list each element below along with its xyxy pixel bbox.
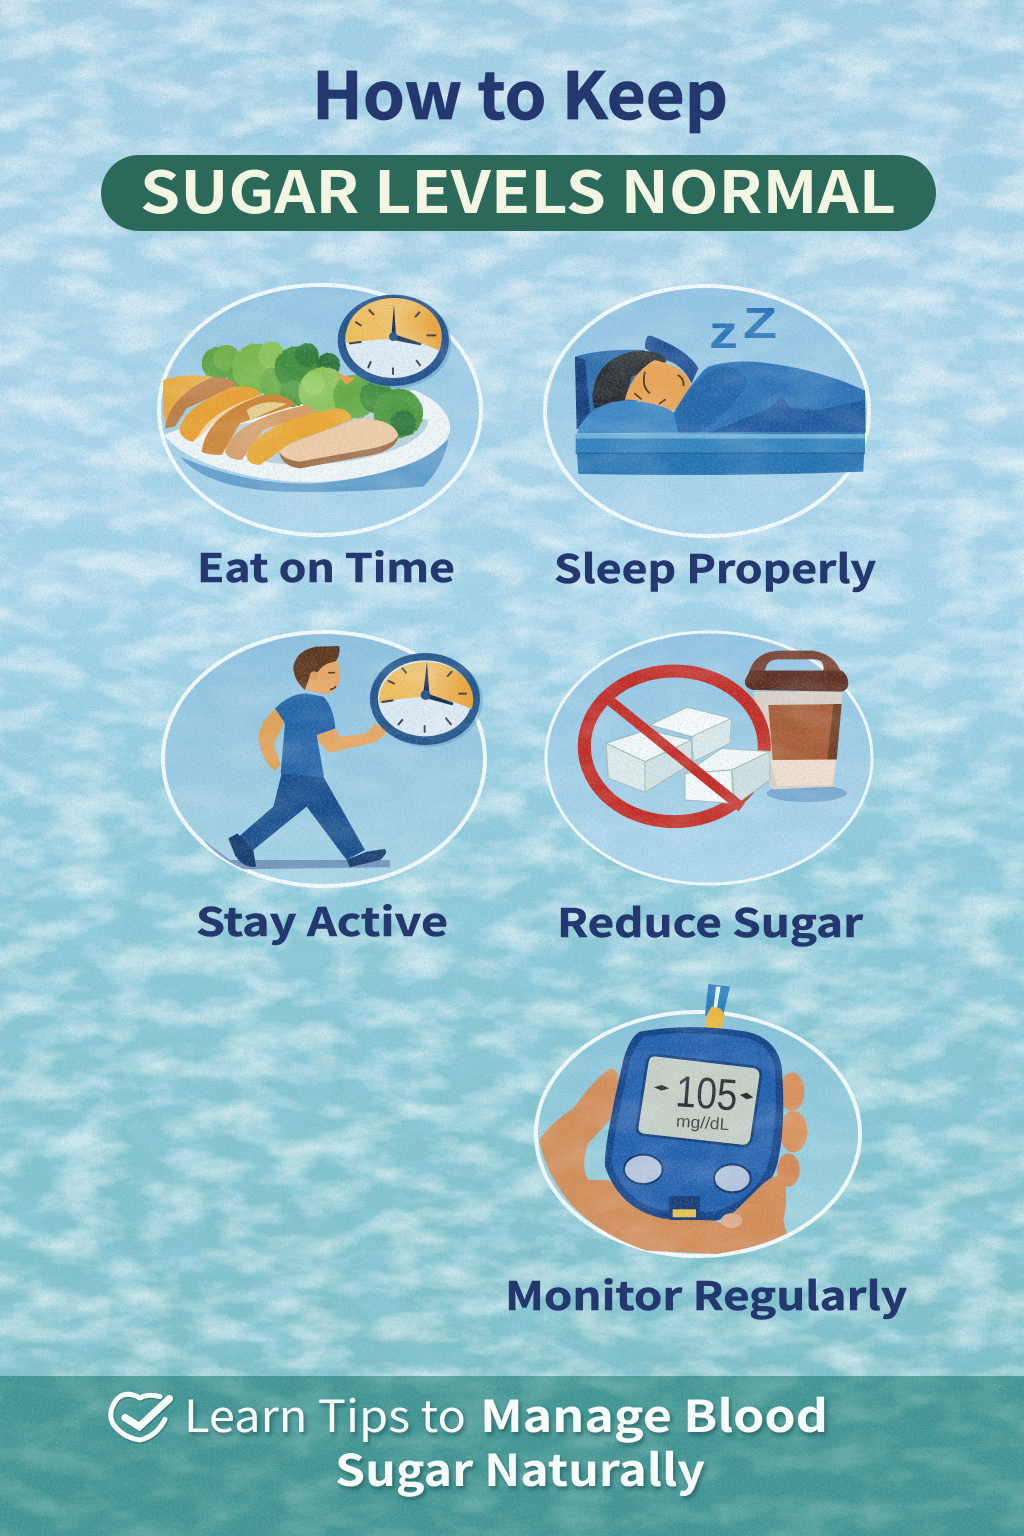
icon: walking man xyxy=(203,646,390,869)
title: How to Keep xyxy=(312,44,728,138)
icon: z z xyxy=(709,299,777,358)
thumb xyxy=(718,1176,786,1243)
label: eat on time: Eat on Time xyxy=(197,538,455,594)
mattress xyxy=(576,433,865,475)
footer text line 1 xyxy=(184,1381,828,1445)
icon: bed and sleeper xyxy=(575,336,866,475)
strip port xyxy=(669,1196,700,1220)
illustration circle xyxy=(546,632,872,884)
prohibition slash xyxy=(608,699,742,807)
illustration circle xyxy=(163,632,485,886)
screen xyxy=(637,1055,761,1146)
plate xyxy=(164,390,450,482)
footer text line 2: Sugar Naturally xyxy=(335,1435,705,1499)
panel: stay active xyxy=(163,632,485,886)
trousers xyxy=(237,773,365,860)
test strip xyxy=(705,984,730,1017)
footer text line 1: Manage Blood xyxy=(480,1381,828,1445)
panel: reduce sugar xyxy=(546,632,872,884)
back arm xyxy=(258,708,284,771)
icon: sugar and coffee xyxy=(584,651,848,822)
coffee cup xyxy=(753,692,843,789)
footer text and icon xyxy=(111,1381,828,1499)
face xyxy=(625,360,691,411)
banner: sugar levels normal: SUGAR LEVELS NORMAL xyxy=(140,146,896,230)
hat xyxy=(645,336,698,383)
icon: z z: Z xyxy=(743,299,777,348)
chicken slices xyxy=(163,375,213,428)
meter reading: 105 xyxy=(674,1067,739,1120)
icon: z z: z xyxy=(709,306,738,358)
meter buttons xyxy=(624,1155,663,1184)
shoes xyxy=(228,833,386,867)
icon: plate with food xyxy=(163,295,451,492)
meat slice xyxy=(279,418,398,468)
icon: hand and meter xyxy=(539,984,807,1254)
blanket xyxy=(673,361,866,433)
palm and thumb xyxy=(539,1068,787,1254)
illustration circle xyxy=(536,1012,860,1256)
plate shadow xyxy=(180,440,448,492)
hair xyxy=(592,351,667,408)
panel: monitor regularly xyxy=(536,984,860,1256)
icon: clock xyxy=(370,653,483,747)
salad xyxy=(202,342,423,438)
fingers xyxy=(779,1072,804,1111)
illustration circle xyxy=(545,286,869,536)
label: stay active: Stay Active xyxy=(196,892,448,948)
footer band xyxy=(0,1376,1024,1536)
clock xyxy=(338,295,451,388)
front arm xyxy=(317,723,386,753)
glucose meter xyxy=(605,1027,783,1221)
icon: heart check xyxy=(111,1394,169,1440)
head xyxy=(305,660,340,694)
label: sleep properly: Sleep Properly xyxy=(554,539,876,595)
label: monitor regularly: Monitor Regularly xyxy=(505,1266,907,1322)
panel: eat on time xyxy=(159,285,481,535)
prohibition ring xyxy=(584,671,764,822)
headboard pillow xyxy=(575,350,645,429)
footer text line 1: Learn Tips to xyxy=(184,1381,466,1445)
sugar cubes xyxy=(606,707,770,805)
panel: sleep properly xyxy=(545,286,869,536)
illustration circle xyxy=(159,285,481,535)
ground shadow xyxy=(203,840,390,869)
front pillow xyxy=(577,401,679,433)
cup shadow xyxy=(767,785,847,802)
label: reduce sugar: Reduce Sugar xyxy=(557,893,864,949)
meter unit: mg//dL xyxy=(675,1111,730,1134)
shirt xyxy=(275,693,335,777)
